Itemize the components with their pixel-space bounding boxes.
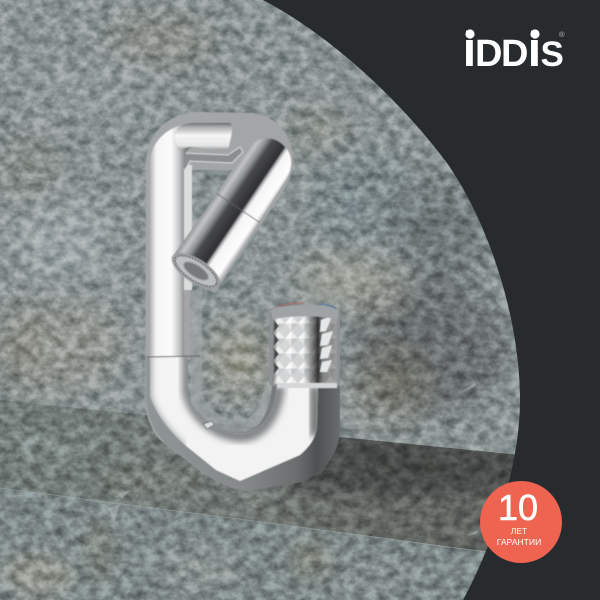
handle right facets bbox=[320, 316, 333, 372]
handle bbox=[269, 303, 340, 388]
lower body under surface bbox=[146, 358, 340, 491]
logo second i dot bbox=[530, 29, 540, 39]
logo second i: i bbox=[528, 23, 541, 77]
faucet chrome body outline bbox=[145, 112, 340, 491]
handle base ring bbox=[277, 383, 337, 388]
highlight fill bbox=[150, 356, 319, 482]
logo bbox=[463, 23, 565, 77]
shelf front edge bbox=[0, 488, 487, 552]
light mineral streaks bbox=[108, 382, 478, 536]
badge circle bbox=[480, 481, 562, 563]
logo letters: DD bbox=[475, 33, 528, 75]
logo first i dot bbox=[465, 29, 475, 39]
faucet bbox=[145, 112, 340, 491]
warranty badge bbox=[480, 481, 562, 563]
thin pipe bbox=[184, 165, 192, 290]
logo letter s: S bbox=[540, 35, 564, 74]
neck right shade bbox=[310, 386, 320, 436]
tube top bend highlight bbox=[175, 123, 232, 151]
main vertical tube bbox=[150, 123, 232, 358]
outer edge shade bbox=[148, 350, 183, 447]
shelf shadow bbox=[282, 437, 515, 500]
aerator ring bbox=[171, 250, 221, 292]
aerator mesh bbox=[181, 259, 211, 283]
hot mark bbox=[277, 303, 304, 307]
shelf front bbox=[0, 488, 490, 600]
spout barrel bbox=[174, 128, 304, 285]
aerator bbox=[166, 246, 226, 296]
logo first i: i bbox=[463, 23, 476, 77]
spout bbox=[174, 128, 304, 285]
inner base fitting bbox=[203, 421, 214, 429]
handle knurl bbox=[273, 316, 337, 384]
aerator rim bbox=[166, 246, 226, 296]
lower body highlight bbox=[150, 356, 319, 482]
cold mark bbox=[319, 304, 336, 309]
inner curve shade bbox=[188, 350, 279, 436]
handle left facets bbox=[274, 320, 279, 374]
stone wall bbox=[0, 0, 520, 454]
shelf blotches bbox=[4, 435, 440, 595]
badge number: 10 bbox=[498, 487, 538, 528]
badge text line 2: ГАРАНТИИ bbox=[497, 537, 541, 547]
thin lever bbox=[174, 172, 181, 245]
body seam bbox=[146, 356, 200, 357]
handle top cap bbox=[271, 305, 339, 320]
inner reflective pipe bbox=[196, 290, 270, 426]
small lever arm bbox=[180, 147, 243, 170]
wall colour blotches bbox=[0, 18, 510, 420]
spout seam bbox=[216, 193, 259, 222]
shelf top bbox=[0, 400, 515, 552]
badge text line 1: ЛЕТ bbox=[511, 526, 527, 536]
logo registered mark: ® bbox=[559, 30, 565, 39]
handle shading bbox=[273, 316, 337, 384]
handle body bbox=[269, 308, 340, 386]
